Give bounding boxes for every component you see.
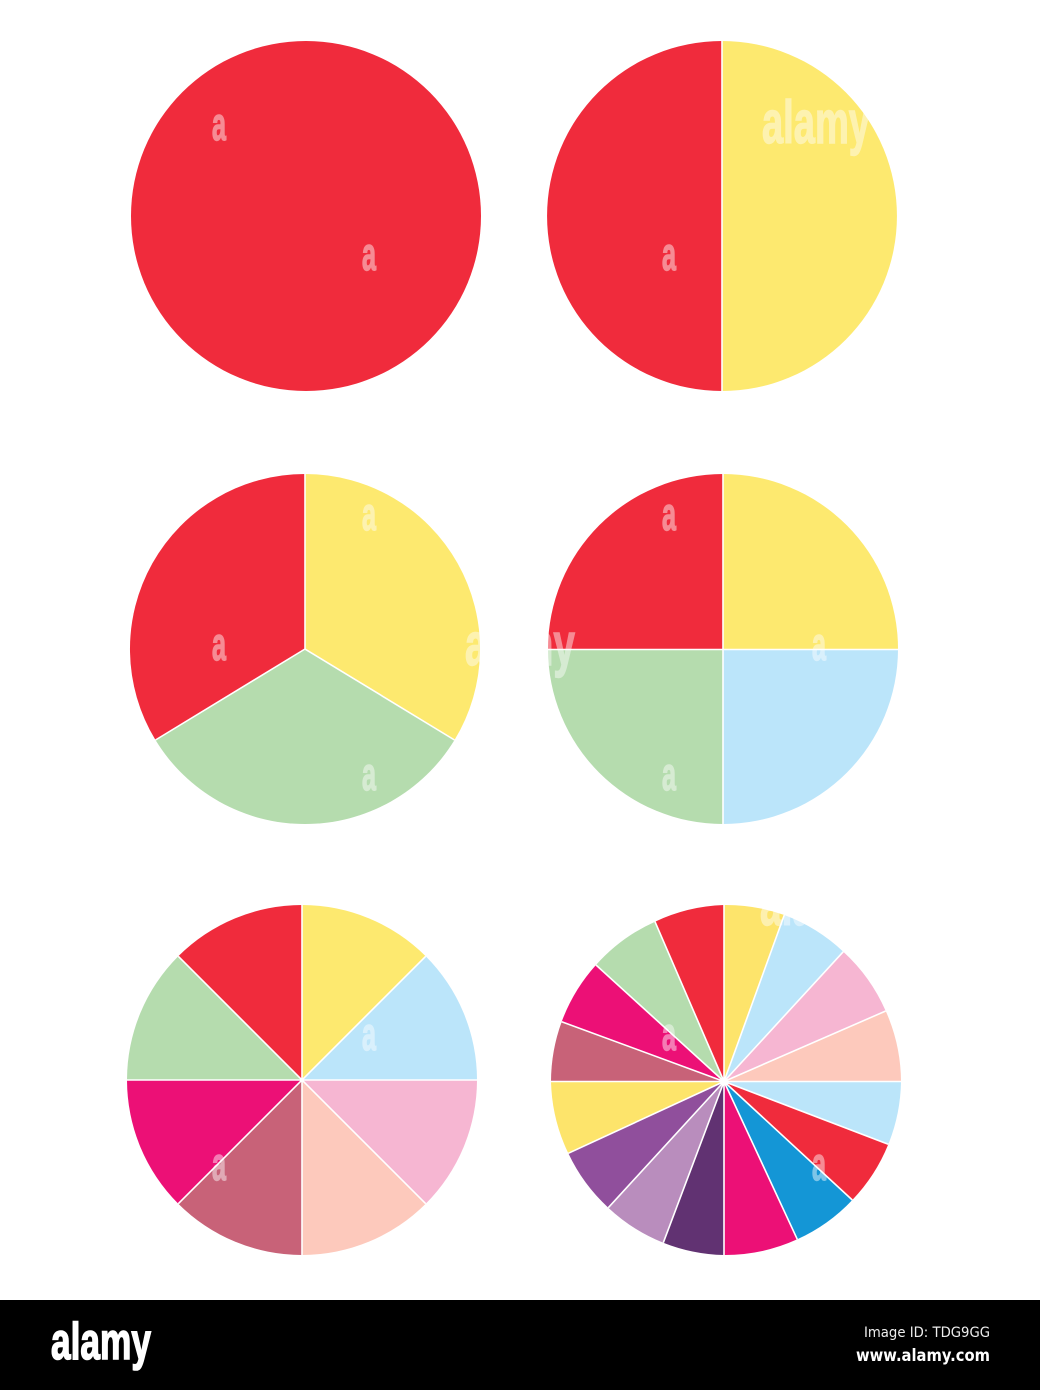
slice: green quarter: [548, 649, 723, 824]
watermark overlay: a: [662, 1008, 676, 1060]
watermark overlay: a: [362, 748, 376, 800]
pie: four quarters: [548, 474, 898, 824]
pie: sixteen slices: [551, 905, 901, 1255]
image id: Image ID: TDG9GG: [864, 1325, 990, 1341]
footer bar: [0, 1300, 1040, 1390]
watermark overlay: alamy: [465, 611, 575, 678]
watermark overlay: alamy: [762, 89, 870, 156]
slice: yellow third: [305, 474, 480, 740]
watermark overlay: a: [662, 228, 676, 280]
watermark overlay: a: [362, 228, 376, 280]
pie: two halves: [547, 41, 897, 391]
slice: blue quarter: [723, 649, 898, 824]
pie: one whole: [131, 41, 481, 391]
watermark overlay: a: [212, 1138, 226, 1190]
footer logo: alamy: [51, 1313, 151, 1371]
watermark overlay: a: [212, 98, 226, 150]
slice: green third: [156, 649, 454, 824]
pie: eight slices: [127, 905, 477, 1255]
watermark overlay: [212, 89, 870, 1190]
watermark overlay: a: [812, 618, 826, 670]
watermark overlay: a: [812, 1138, 826, 1190]
watermark overlay: a: [362, 1008, 376, 1060]
slice: yellow half: [722, 41, 897, 391]
watermark overlay: alamy: [760, 871, 870, 938]
slice: yellow quarter: [723, 474, 898, 649]
pie: three thirds: [130, 474, 480, 824]
watermark overlay: a: [662, 748, 676, 800]
watermark overlay: a: [212, 618, 226, 670]
watermark overlay: a: [662, 488, 676, 540]
slice: red half: [547, 41, 722, 391]
slice: red quarter: [548, 474, 723, 649]
watermark overlay: a: [362, 488, 376, 540]
slice: red third: [130, 474, 305, 740]
website url: www.alamy.com: [856, 1346, 990, 1366]
